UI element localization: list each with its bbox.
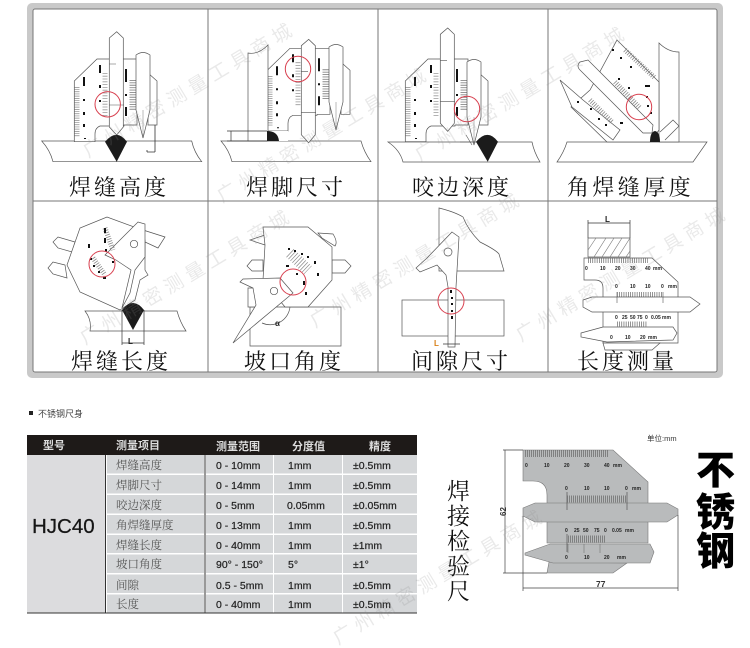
vertical title: welding gauge: 验 [447, 554, 470, 579]
watermarks: 广州精密测量工具商城 [512, 201, 734, 346]
panel: weld length [48, 217, 186, 374]
dimension drawing: gauge with 62 x 77: 75 [594, 528, 600, 534]
vertical title: welding gauge: 焊 [447, 479, 470, 504]
dimension drawing: gauge with 62 x 77: 20 [564, 463, 570, 469]
panel: length measurement: mm [662, 315, 671, 321]
dimension drawing: gauge with 62 x 77: mm [625, 528, 634, 534]
big title: stainless steel: 锈 [696, 492, 735, 535]
panel: length measurement: 0 [610, 335, 613, 341]
panel: length measurement: 10 [600, 266, 606, 272]
dimension label L: L [434, 339, 439, 348]
big title: stainless steel: 不 [696, 450, 735, 493]
table rows: 90° - 150° [216, 559, 263, 571]
table header: 精度 [369, 439, 391, 453]
table rows: ±1° [353, 559, 369, 571]
panel: length measurement: 0 [615, 315, 618, 321]
watermarks: 广州精密测量工具商城 [306, 187, 528, 332]
table rows: 0.05mm [287, 500, 325, 512]
panel: length measurement: mm [668, 284, 677, 290]
dimension drawing: gauge with 62 x 77: mm [632, 486, 641, 492]
label: weld length: 焊缝长度 [71, 349, 171, 374]
watermarks: 广州精密测量工具商城 [79, 17, 301, 162]
dimension drawing: gauge with 62 x 77: 0 [565, 486, 568, 492]
table header: 型号 [43, 439, 65, 452]
angle symbol: α [275, 319, 280, 328]
panel: length measurement: 10 [625, 335, 631, 341]
dimension drawing: gauge with 62 x 77: 10 [604, 486, 610, 492]
dimension drawing: gauge with 62 x 77 [499, 450, 678, 591]
table rows: 1mm [288, 580, 312, 592]
table rows: 1mm [288, 460, 312, 472]
table rows: 长度 [116, 597, 139, 611]
big title: stainless steel [696, 450, 735, 574]
table rows: 5° [288, 559, 298, 571]
dimension drawing: gauge with 62 x 77: mm [613, 463, 622, 469]
table rows: 1mm [288, 599, 312, 611]
label: weld height: 焊缝高度 [69, 175, 169, 200]
table rows: 焊缝高度 [116, 458, 162, 472]
panel: length measurement: 0 [615, 284, 618, 290]
panel: length measurement: mm [648, 335, 657, 341]
dimension drawing: gauge with 62 x 77: 10 [584, 555, 590, 561]
table header: 分度值 [292, 439, 325, 453]
table rows: 1mm [288, 480, 312, 492]
table rows: 间隙 [116, 578, 139, 592]
table header [27, 435, 417, 455]
table rows: ±0.5mm [353, 480, 391, 492]
dimension drawing: gauge with 62 x 77: 0 [525, 463, 528, 469]
label: length measurement: 长度测量 [577, 349, 677, 374]
panel: length measurement: mm [653, 266, 662, 272]
panel: length measurement [577, 215, 700, 374]
model cell [27, 455, 105, 613]
panel: length measurement: 40 [645, 266, 651, 272]
table rows: ±0.05mm [353, 500, 397, 512]
panel: weld leg size [221, 39, 371, 200]
big title: stainless steel: 钢 [696, 531, 735, 574]
table rows: ±0.5mm [353, 460, 391, 472]
panel: length measurement: 25 [622, 315, 628, 321]
dimension drawing: gauge with 62 x 77: 0 [565, 528, 568, 534]
table rows [116, 458, 397, 611]
unit note: 单位:mm [647, 433, 677, 443]
table rows: 0.5 - 5mm [216, 580, 264, 592]
watermarks: 广州精密测量工具商城 [76, 204, 298, 349]
panel: length measurement: 20 [615, 266, 621, 272]
dimension drawing: gauge with 62 x 77: 0 [565, 555, 568, 561]
label: weld leg size: 焊脚尺寸 [246, 175, 346, 200]
label: bevel angle: 坡口角度 [244, 349, 344, 374]
panel: length measurement: 10 [630, 284, 636, 290]
vertical title: welding gauge: 尺 [447, 579, 470, 604]
table rows: 1mm [288, 540, 312, 552]
table rows: ±0.5mm [353, 520, 391, 532]
dimension drawing: gauge with 62 x 77: 0 [625, 486, 628, 492]
panel: undercut depth [388, 28, 540, 200]
dimension drawing: gauge with 62 x 77: 10 [584, 486, 590, 492]
table rows: 1mm [288, 520, 312, 532]
table rows: ±0.5mm [353, 599, 391, 611]
panel: fillet weld thickness [557, 40, 707, 200]
dimension label L: L [605, 215, 610, 224]
label: undercut depth: 咬边深度 [412, 175, 512, 200]
panel: gap size [402, 208, 511, 374]
table rows: 0 - 5mm [216, 500, 255, 512]
caption: stainless steel body: 不锈钢尺身 [38, 408, 83, 419]
dimension drawing: gauge with 62 x 77: 40 [604, 463, 610, 469]
dimension drawing: gauge with 62 x 77: 50 [583, 528, 589, 534]
table rows: 0 - 40mm [216, 540, 261, 552]
dimension 77: 77 [596, 579, 606, 589]
dimension drawing: gauge with 62 x 77: 25 [574, 528, 580, 534]
panel: length measurement: 30 [630, 266, 636, 272]
panel: length measurement: 50 [630, 315, 636, 321]
label: fillet weld thickness: 角焊缝厚度 [567, 175, 694, 200]
panel: length measurement: 75 [637, 315, 643, 321]
watermarks: 广州精密测量工具商城 [411, 21, 633, 166]
panel: length measurement: 0 [661, 284, 664, 290]
dimension drawing: gauge with 62 x 77: mm [617, 555, 626, 561]
panel: length measurement: 0.05 [651, 315, 661, 321]
vertical title: welding gauge: 检 [447, 529, 470, 554]
panel: length measurement: 0 [585, 266, 588, 272]
panel: usage diagrams frame [27, 3, 723, 378]
panel: weld height [42, 32, 202, 200]
table rows: 0 - 10mm [216, 460, 261, 472]
dimension label L: L [128, 337, 133, 346]
dimension drawing: gauge with 62 x 77: 10 [544, 463, 550, 469]
table rows: 角焊缝厚度 [116, 518, 174, 532]
model cell: HJC40 [32, 515, 95, 538]
panel: bevel angle [233, 227, 351, 374]
table rows: 坡口角度 [116, 557, 162, 571]
table: specifications [27, 435, 417, 613]
table rows: 0 - 40mm [216, 599, 261, 611]
table rows: 焊脚尺寸 [116, 478, 162, 492]
dimension drawing: gauge with 62 x 77: 30 [584, 463, 590, 469]
panel: length measurement: 10 [645, 284, 651, 290]
watermarks: 广州精密测量工具商城 [329, 504, 551, 648]
table rows: ±0.5mm [353, 580, 391, 592]
dimension 62: 62 [499, 507, 508, 516]
table header: 测量项目 [116, 438, 160, 452]
watermarks: 广州精密测量工具商城 [213, 62, 435, 207]
vertical title: welding gauge [447, 479, 471, 604]
table header: 测量范围 [216, 439, 260, 453]
dimension drawing: gauge with 62 x 77: 20 [604, 555, 610, 561]
label: gap size: 间隙尺寸 [411, 349, 511, 374]
panel: length measurement: 20 [640, 335, 646, 341]
table rows: 0 - 13mm [216, 520, 261, 532]
dimension drawing: gauge with 62 x 77: 0 [604, 528, 607, 534]
vertical title: welding gauge: 接 [447, 504, 471, 529]
table rows: ±1mm [353, 540, 382, 552]
panel: length measurement: 0 [645, 315, 648, 321]
table rows: 0 - 14mm [216, 480, 261, 492]
dimension drawing: gauge with 62 x 77: 0.05 [612, 528, 622, 534]
table rows: 焊缝长度 [116, 538, 162, 552]
table rows: 咬边深度 [116, 498, 162, 512]
